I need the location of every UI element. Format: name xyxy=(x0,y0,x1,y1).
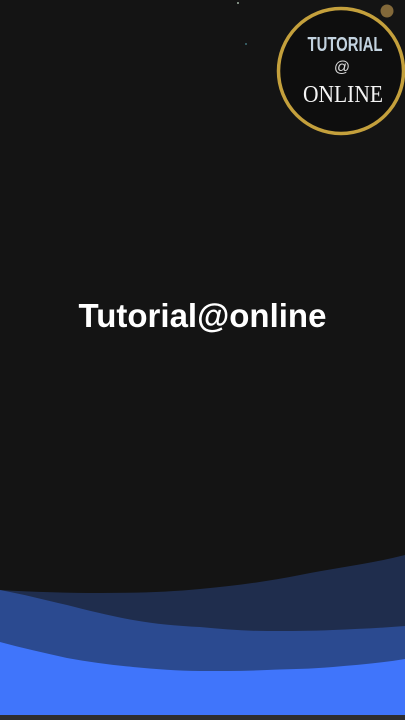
wave: dark navy xyxy=(0,555,405,650)
bottom bar xyxy=(0,715,405,720)
gold dot xyxy=(380,4,394,18)
gold ring xyxy=(278,8,404,134)
wave: mid blue xyxy=(0,590,405,680)
wave: bright blue xyxy=(0,642,405,715)
star specks xyxy=(237,2,247,45)
title: Tutorial@online xyxy=(79,297,326,334)
logo badge xyxy=(276,4,405,136)
wave layers xyxy=(0,555,405,720)
logo text: online: ONLINE xyxy=(303,82,383,108)
logo text: at sign: @ xyxy=(334,59,350,76)
